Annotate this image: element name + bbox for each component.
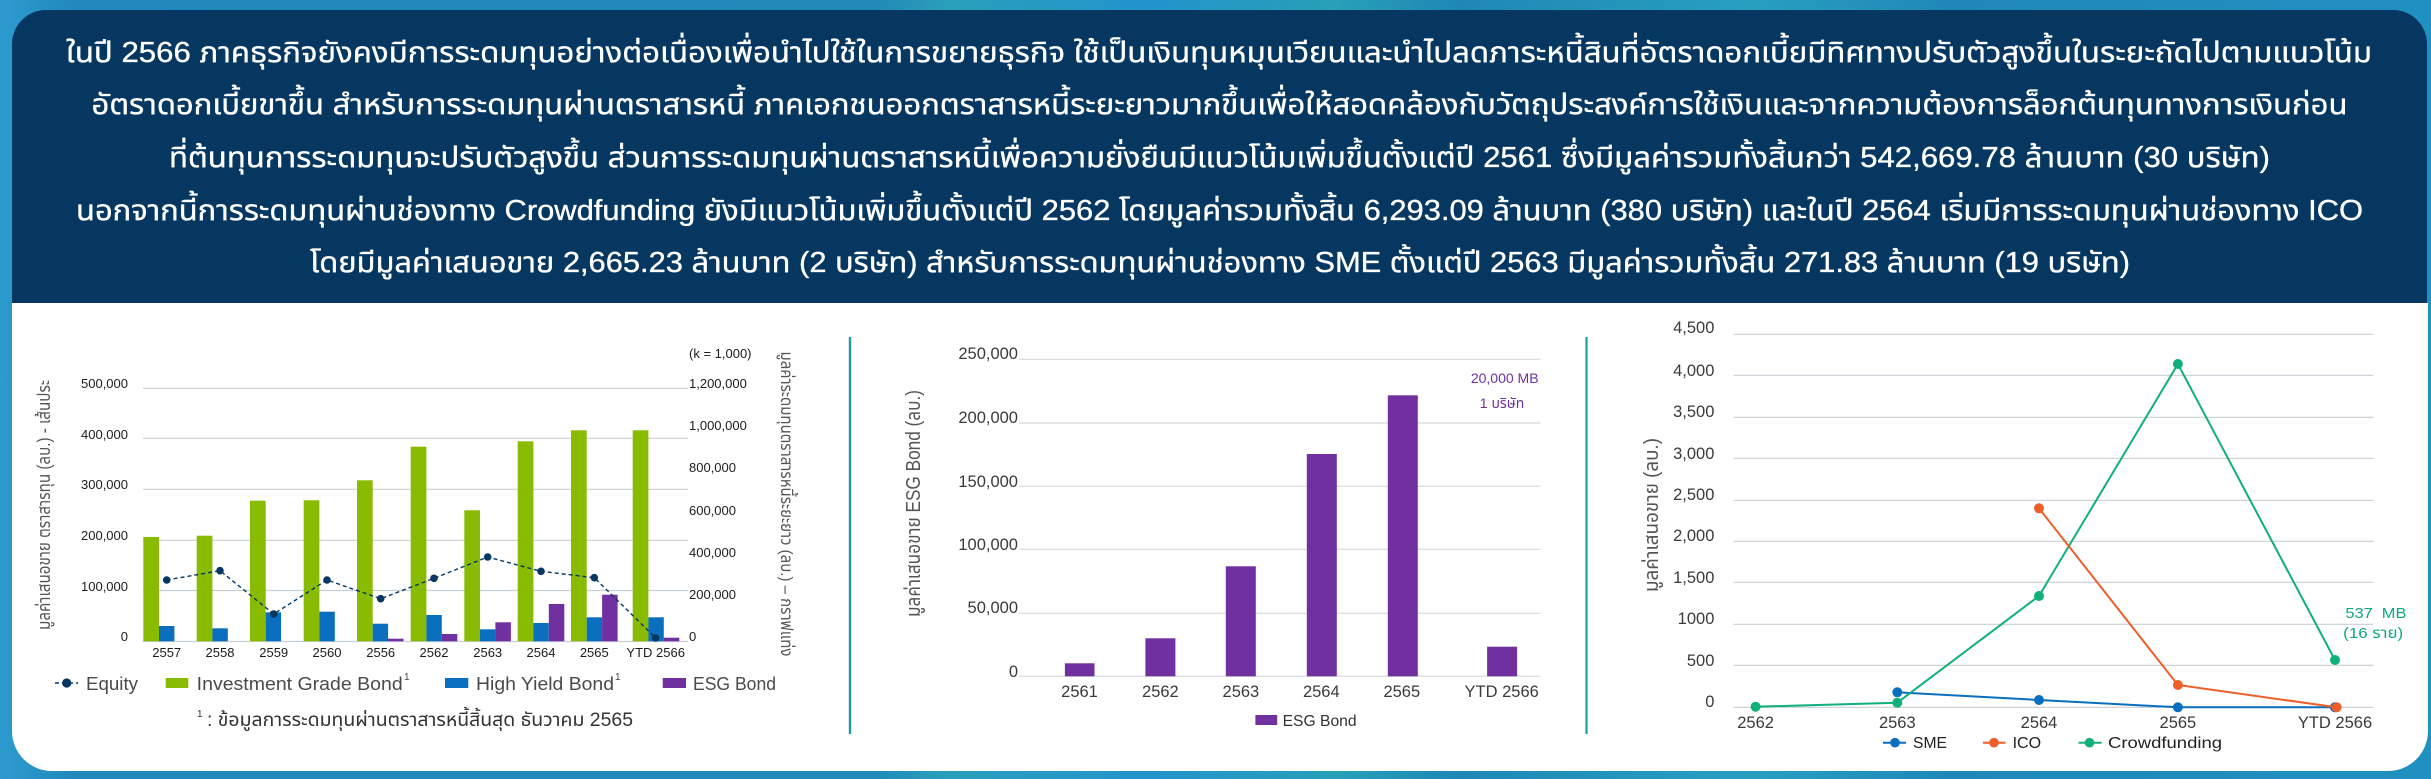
x axis labels: YTD 2566 <box>2298 714 2372 732</box>
y axis labels: 2,000 <box>1673 527 1714 545</box>
line: ICO <box>2034 503 2342 712</box>
right axis labels: 200,000 <box>689 587 736 602</box>
x axis labels <box>1061 683 1539 701</box>
legend: 1 <box>615 672 621 683</box>
y axis labels: 50,000 <box>968 599 1018 617</box>
right axis labels <box>689 346 752 644</box>
x axis labels: 2561 <box>1061 683 1098 701</box>
annotation: crowdfunding 2566: (16 ราย) <box>2343 625 2403 642</box>
y axis labels <box>958 345 1018 681</box>
y axis labels: 0 <box>1705 693 1714 711</box>
annotation: 2566 value: 20,000 MB <box>1471 370 1539 386</box>
x axis labels: 2558 <box>206 645 234 660</box>
left axis labels: 200,000 <box>81 528 128 543</box>
x axis labels <box>152 645 685 660</box>
line: SME <box>1892 687 2340 712</box>
legend: Crowdfunding <box>2108 735 2222 752</box>
left axis labels: 400,000 <box>81 427 128 442</box>
y axis labels: 3,000 <box>1673 445 1714 463</box>
y axis labels: 4,500 <box>1673 319 1714 337</box>
legend: High Yield Bond <box>476 674 614 694</box>
y axis labels <box>1673 319 1714 711</box>
y axis labels: 4,000 <box>1673 362 1714 380</box>
y axis labels: 150,000 <box>958 473 1018 491</box>
legend <box>1883 735 2222 752</box>
axis title: มูลค่าเสนอขาย ESG Bond (ลบ.) <box>902 390 926 617</box>
summary paragraph <box>66 32 2372 280</box>
x axis labels: 2564 <box>2021 714 2057 732</box>
chart: alternative fundraising channels <box>1640 319 2406 752</box>
summary paragraph: อัตราดอกเบี้ยขาขึ้น สำหรับการระดมทุนผ่านตราสารหนี้ ภาคเอกชนออกตราสารหนี้ระยะยาวมากขึ้นเพื่อให้สอดคล้องกับวัตถุประสงค์การใช้เงินและจากความต้องการล็อกต้นทุนทางการเงินก่อน <box>92 84 2348 121</box>
x axis labels: 2565 <box>2160 714 2196 732</box>
left axis labels: 0 <box>121 629 128 644</box>
right axis labels: 400,000 <box>689 545 736 560</box>
summary paragraph: นอกจากนี้การระดมทุนผ่านช่องทาง Crowdfunding ยังมีแนวโน้มเพิ่มขึ้นตั้งแต่ปี 2562 โดยมูลค่ารวมทั้งสิ้น 6,293.09 ล้านบาท (380 บริษัท) และในปี 2564 เริ่มมีการระดมทุนผ่านช่องทาง ICO <box>76 190 2363 228</box>
bars: investment grade bond <box>143 430 648 641</box>
y axis labels: 0 <box>1009 663 1018 681</box>
left axis labels: 500,000 <box>81 376 128 391</box>
x axis labels: 2557 <box>152 645 181 660</box>
right axis title: มูลค่าระดมทุนตราสารหนี้ระยะยาว (ลบ.) – กราฟแท่ง <box>775 352 799 656</box>
right axis labels: 0 <box>689 629 696 644</box>
legend: 1 <box>404 672 410 683</box>
x axis labels: 2556 <box>366 645 395 660</box>
x axis labels: 2564 <box>1303 683 1340 701</box>
legend: SME <box>1913 735 1947 752</box>
annotation: 2566 value <box>1471 370 1539 411</box>
annotation: crowdfunding 2566 <box>2343 605 2406 642</box>
line: crowdfunding <box>1751 359 2340 712</box>
x axis labels: 2562 <box>1142 683 1179 701</box>
legend: ESG Bond <box>693 674 776 694</box>
y axis labels: 500 <box>1687 652 1714 670</box>
left axis title: มูลค่าเสนอขาย ตราสารทุน (ลบ.) - เส้นประ <box>34 380 56 630</box>
right axis labels: 600,000 <box>689 503 736 518</box>
y axis labels: 100,000 <box>958 536 1018 554</box>
x axis labels: YTD 2566 <box>626 645 685 660</box>
bars: high yield bond <box>159 612 664 641</box>
left axis labels: 100,000 <box>81 579 128 594</box>
panel: summary text <box>12 10 2427 303</box>
chart: capital raising, equity and bonds <box>34 346 799 732</box>
x axis labels: 2562 <box>1737 714 1774 732</box>
annotation: 2566 value: 1 บริษัท <box>1480 395 1524 411</box>
panel: charts <box>12 303 2428 771</box>
right axis labels: 800,000 <box>689 460 736 475</box>
legend: Investment Grade Bond <box>197 674 403 694</box>
axis title: มูลค่าเสนอขาย (ลบ.) <box>1640 438 1664 592</box>
annotation: crowdfunding 2566: 537 MB <box>2345 605 2406 622</box>
right axis labels: (k = 1,000) <box>689 346 752 361</box>
summary paragraph: ในปี 2566 ภาคธุรกิจยังคงมีการระดมทุนอย่างต่อเนื่องเพื่อนำไปใช้ในการขยายธุรกิจ ใช้เป็นเงินทุนหมุนเวียนและนำไปลดภาระหนี้สินที่อัตราดอกเบี้ยมีทิศทางปรับตัวสูงขึ้นในระยะถัดไปตามแนวโน้ม <box>66 32 2372 70</box>
y axis labels: 200,000 <box>958 409 1018 427</box>
y axis labels: 1000 <box>1678 610 1714 628</box>
x axis labels: 2565 <box>580 645 609 660</box>
y axis labels: 2,500 <box>1673 486 1714 504</box>
legend <box>55 672 776 694</box>
bars: ESG bond <box>388 595 679 641</box>
x axis labels: 2563 <box>1223 683 1259 701</box>
summary paragraph: ที่ต้นทุนการระดมทุนจะปรับตัวสูงขึ้น ส่วนการระดมทุนผ่านตราสารหนี้เพื่อความยั่งยืนมีแนวโน้มเพิ่มขึ้นตั้งแต่ปี 2561 ซึ่งมีมูลค่ารวมทั้งสิ้นกว่า 542,669.78 ล้านบาท (30 บริษัท) <box>169 137 2270 175</box>
x axis labels: 2562 <box>420 645 448 660</box>
y axis labels: 3,500 <box>1673 403 1714 421</box>
bars <box>1065 395 1517 676</box>
summary paragraph: โดยมีมูลค่าเสนอขาย 2,665.23 ล้านบาท (2 บริษัท) สำหรับการระดมทุนผ่านช่องทาง SME ตั้งแต่ปี 2563 มีมูลค่ารวมทั้งสิ้น 271.83 ล้านบาท (19 บริษัท) <box>310 244 2130 280</box>
x axis labels: 2563 <box>473 645 502 660</box>
x axis labels: YTD 2566 <box>1465 683 1539 701</box>
footnote: 1 <box>197 709 203 720</box>
x axis labels: 2559 <box>259 645 288 660</box>
chart: ESG bond <box>902 345 1540 730</box>
legend: ICO <box>2013 735 2041 752</box>
legend: Equity <box>86 674 138 694</box>
left axis labels: 300,000 <box>81 477 128 492</box>
right axis labels: 1,000,000 <box>689 418 747 433</box>
footnote: : ข้อมูลการระดมทุนผ่านตราสารหนี้สิ้นสุด ธันวาคม 2565 <box>207 706 633 732</box>
x axis labels: 2564 <box>527 645 555 660</box>
line: equity <box>163 553 660 642</box>
x axis labels <box>1737 714 2372 732</box>
right axis labels: 1,200,000 <box>689 376 747 391</box>
legend: ESG Bond <box>1283 713 1357 730</box>
y axis labels: 250,000 <box>958 345 1018 363</box>
y axis labels: 1,500 <box>1673 569 1714 587</box>
x axis labels: 2563 <box>1879 714 1916 732</box>
left axis labels <box>81 376 128 644</box>
x axis labels: 2565 <box>1383 683 1420 701</box>
x axis labels: 2560 <box>313 645 341 660</box>
